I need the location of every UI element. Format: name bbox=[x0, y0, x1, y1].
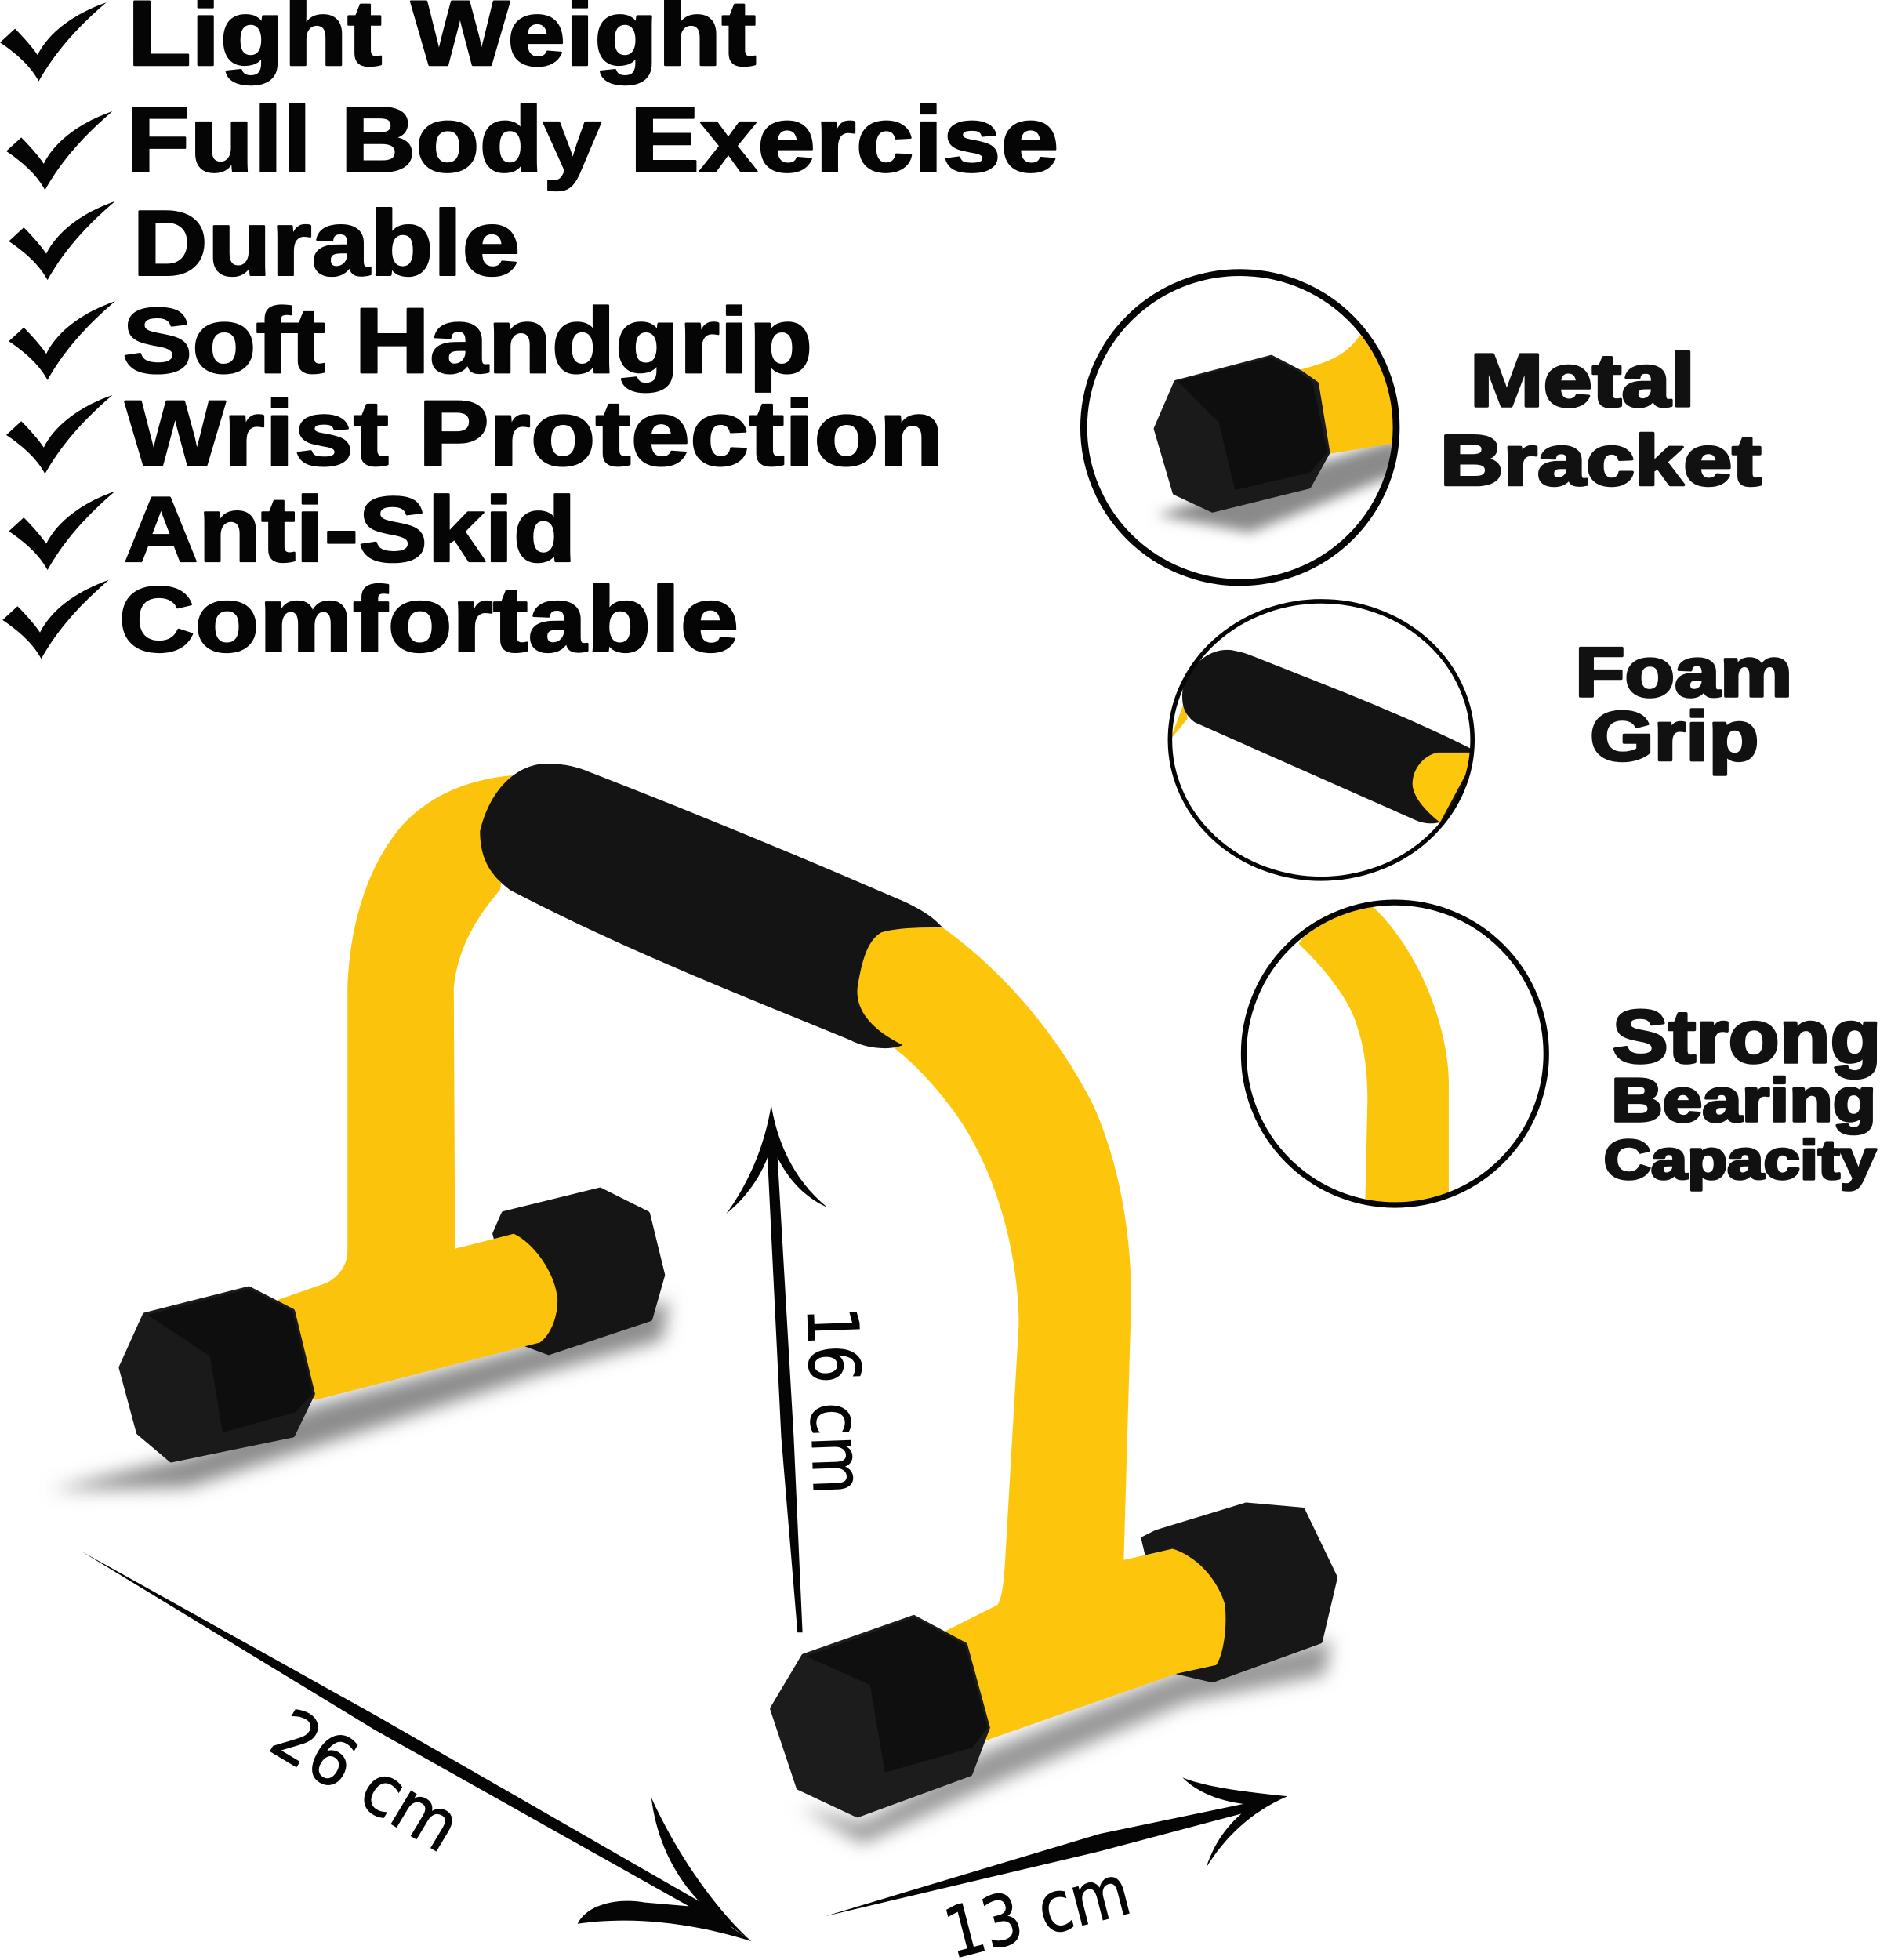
dimension: width 13 cm bbox=[825, 1777, 1287, 1960]
near stand: rear hex cap bbox=[1144, 1505, 1335, 1680]
detail callout: metal bracket bbox=[1083, 273, 1762, 583]
ring bbox=[1243, 902, 1546, 1205]
foam grip bbox=[480, 764, 942, 1048]
label: Metal Bracket: Bracket bbox=[1440, 422, 1762, 501]
dimension: length 26 cm bbox=[82, 1552, 751, 1941]
arrow: length bbox=[82, 1552, 751, 1941]
check item: Full Body Exercise: Full Body Exercise bbox=[126, 88, 1058, 191]
check item: Anti-Skid: Anti-Skid bbox=[124, 478, 576, 582]
label: 26 cm: 26 cm bbox=[257, 1693, 474, 1868]
label: Foam Grip: Grip bbox=[1590, 696, 1758, 775]
far stand: foot tube and post bbox=[278, 775, 557, 1400]
label: Foam Grip bbox=[1575, 633, 1792, 775]
arrow: width bbox=[825, 1777, 1287, 1916]
product: push-up bar bbox=[50, 764, 1335, 1844]
inset: foam handle bbox=[1170, 650, 1481, 823]
check item: Soft Handgrip: Soft Handgrip bbox=[122, 289, 812, 393]
label: Metal Bracket bbox=[1440, 339, 1762, 501]
label: Strong Bearing Capacity: Strong bbox=[1613, 995, 1880, 1079]
check item: Durable: Durable bbox=[132, 192, 520, 296]
label: Foam Grip: Foam bbox=[1575, 633, 1792, 711]
far stand: rear hex cap bbox=[495, 1190, 662, 1352]
near stand: post and foot tube bbox=[857, 927, 1225, 1741]
label: Metal Bracket: Metal bbox=[1470, 339, 1695, 423]
label: 16 cm: 16 cm bbox=[790, 1305, 878, 1496]
arrow: height bbox=[726, 1105, 828, 1632]
floor shadows bbox=[50, 1300, 1331, 1844]
check item: Durable bbox=[9, 192, 520, 296]
label: Strong Bearing Capacity bbox=[1604, 995, 1880, 1191]
check item: Comfortable: Comfortable bbox=[118, 568, 739, 672]
label: Strong Bearing Capacity: Bearing bbox=[1611, 1065, 1876, 1134]
detail callout: foam grip bbox=[1170, 601, 1792, 879]
inset: hex end cap and bracket bbox=[1156, 335, 1406, 532]
dimension: height 16 cm bbox=[726, 1105, 878, 1632]
feature checklist bbox=[0, 0, 1058, 672]
label: Strong Bearing Capacity: Capacity bbox=[1604, 1129, 1876, 1191]
ring bbox=[1170, 601, 1472, 879]
inset: curved tube bbox=[1299, 906, 1449, 1213]
check item: Wrist Protection: Wrist Protection bbox=[125, 382, 944, 485]
detail callout: strong bearing capacity bbox=[1243, 902, 1880, 1213]
far stand: near hex cap bbox=[122, 1289, 313, 1460]
ring bbox=[1083, 273, 1396, 583]
near stand: front hex cap bbox=[772, 1617, 988, 1815]
